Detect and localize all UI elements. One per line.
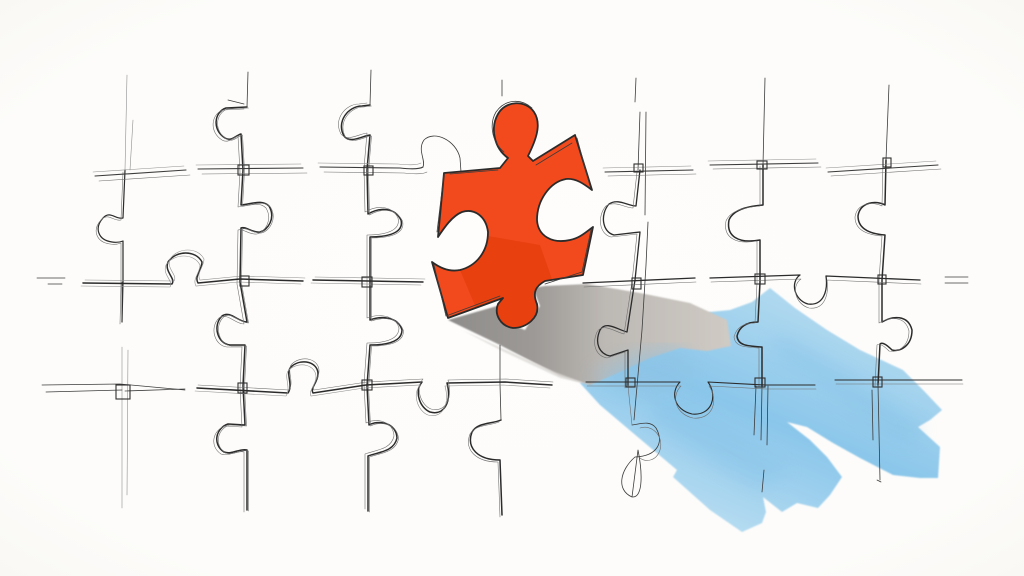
grey shadow wash <box>448 284 731 400</box>
piece outline <box>432 103 593 328</box>
blue watercolor wash <box>580 288 942 532</box>
vertical line: column 4 <box>468 80 502 517</box>
vertical line: column 2 <box>213 72 273 512</box>
vertical line: column 6 <box>726 78 768 492</box>
piece fill <box>432 103 593 328</box>
horizontal line: row 1 <box>93 136 941 181</box>
darker lower shade <box>460 236 552 328</box>
vertical line: column 1 <box>96 75 133 508</box>
sketched puzzle grid <box>37 70 968 517</box>
vertical line: column 5 <box>595 78 661 497</box>
vertical line: column 3 <box>338 70 404 512</box>
vertical line: column 7 <box>855 85 912 482</box>
horizontal line: row 3 <box>42 359 963 418</box>
horizontal line: row 2 <box>37 250 968 308</box>
crossing marks <box>116 158 891 399</box>
red puzzle piece <box>432 101 593 328</box>
sketched double lines <box>434 101 591 316</box>
